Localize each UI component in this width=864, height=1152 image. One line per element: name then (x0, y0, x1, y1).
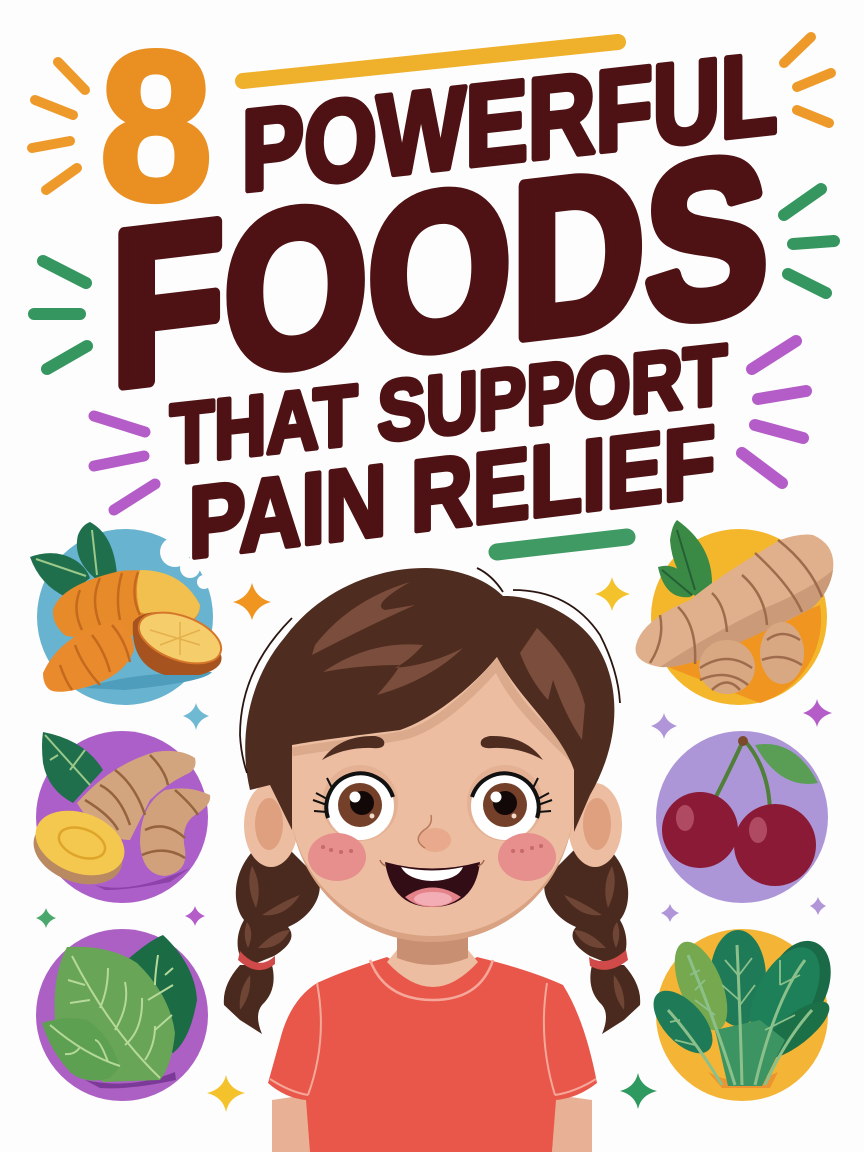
purple sparks right (742, 341, 806, 483)
sparkles (36, 577, 832, 1112)
icon: turmeric roots (30, 522, 228, 705)
purple sparks left (94, 416, 155, 510)
shirt (268, 957, 597, 1152)
title (100, 7, 778, 580)
icon: spinach (643, 929, 843, 1101)
icon: cherries (656, 731, 828, 903)
orange sparks left (32, 62, 85, 190)
girl character (224, 568, 640, 1152)
right cheek (498, 833, 556, 881)
icon: ginger root yellow circle (636, 520, 833, 705)
icon: leaves purple circle (36, 929, 208, 1101)
title line: that support: THAT SUPPORT (170, 327, 727, 483)
title line: 8: 8 (100, 7, 212, 244)
left cheek (308, 833, 366, 881)
decorative green underline (497, 537, 627, 552)
title line: pain relief: PAIN RELIEF (188, 404, 716, 580)
decorative yellow underline (243, 42, 618, 81)
orange sparks right (784, 37, 831, 123)
eyebrows (322, 736, 384, 760)
green sparks left (34, 261, 87, 369)
right eye (467, 765, 552, 841)
nose (418, 815, 451, 852)
green sparks right (784, 189, 834, 293)
left braid (224, 850, 320, 1034)
face (290, 630, 574, 942)
arms (272, 1095, 312, 1152)
left eye (313, 765, 398, 841)
mouth (380, 860, 484, 907)
right braid (544, 850, 640, 1034)
right ear (568, 783, 622, 867)
ears (244, 783, 298, 867)
hair (245, 568, 614, 832)
icon: ginger purple circle (25, 731, 210, 903)
neck (387, 920, 478, 987)
